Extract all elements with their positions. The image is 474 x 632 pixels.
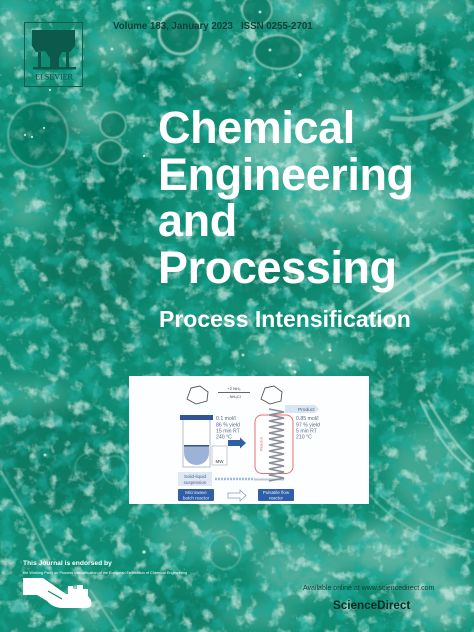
icon: tree [32, 30, 76, 70]
solid-liquid suspension label [178, 472, 212, 486]
endorsement heading: This Journal is endorsed by [23, 560, 112, 567]
product label [285, 405, 319, 413]
label: microwave batch reactor: Microwave [185, 490, 207, 495]
large ring lower right [420, 400, 474, 472]
batch conditions: 86 % yield [216, 422, 240, 428]
endorsement detail: the Working Party on Process Intensification of the European Federation of Chemical Engineering [23, 571, 187, 575]
label: microwave batch reactor: batch reactor [183, 496, 210, 500]
reaction scheme [187, 386, 282, 404]
icon: endorsing party hand logo [23, 578, 92, 608]
flow conditions: 210 °C [296, 434, 312, 440]
label: pulsatile flow reactor: Pulsatile flow [263, 490, 290, 495]
batch conditions: 0.1 mol/l [216, 416, 236, 422]
logo: Elsevier tree emblem [24, 22, 83, 87]
issue information line: Volume 183, January 2023 ISSN 0255-2701 [113, 21, 313, 32]
ScienceDirect wordmark: ScienceDirect [333, 599, 410, 612]
ridged band right [350, 250, 474, 322]
reaction scheme: - NH₄Cl [227, 394, 241, 399]
flow conditions [296, 416, 320, 440]
pulsatile flow reactor coil: Reactor [258, 436, 264, 451]
pulsatile flow reactor coil [255, 409, 293, 481]
title [158, 102, 414, 292]
batch reactor: MW [216, 459, 224, 464]
batch conditions [216, 416, 241, 440]
small highlights [24, 6, 332, 554]
solid-liquid suspension label: Solid-liquid [184, 474, 207, 479]
product label: Product [298, 407, 315, 413]
panel: graphical abstract [129, 376, 369, 504]
subtitle: Process Intensification [159, 306, 411, 332]
availability text: Available online at www.sciencedirect.com [303, 585, 434, 592]
flow conditions: 5 min RT [296, 428, 318, 434]
label: pulsatile flow reactor [258, 489, 294, 501]
publisher name: ELSEVIER [35, 72, 74, 82]
bubble outlines [159, 12, 201, 54]
title: Processing [158, 242, 397, 292]
batch conditions: 15 min RT [216, 428, 241, 434]
solid-liquid suspension label: suspension [184, 480, 207, 485]
title: Engineering [158, 148, 414, 200]
flow conditions: 97 % yield [296, 422, 320, 428]
reeds lower left [0, 470, 118, 632]
batch reactor [180, 415, 227, 467]
title: and [158, 195, 237, 246]
arrow [228, 438, 246, 448]
flow conditions: 0.85 mol/l [296, 416, 318, 422]
light zones [0, 0, 28, 65]
reaction scheme: +2 NH₃ [227, 386, 241, 391]
title: Chemical [158, 102, 355, 153]
outline arrow [228, 490, 246, 501]
label: microwave batch reactor [178, 489, 214, 501]
label: pulsatile flow reactor: reactor [269, 496, 283, 500]
dark zones [115, 50, 185, 100]
batch conditions: 240 °C [216, 434, 232, 440]
